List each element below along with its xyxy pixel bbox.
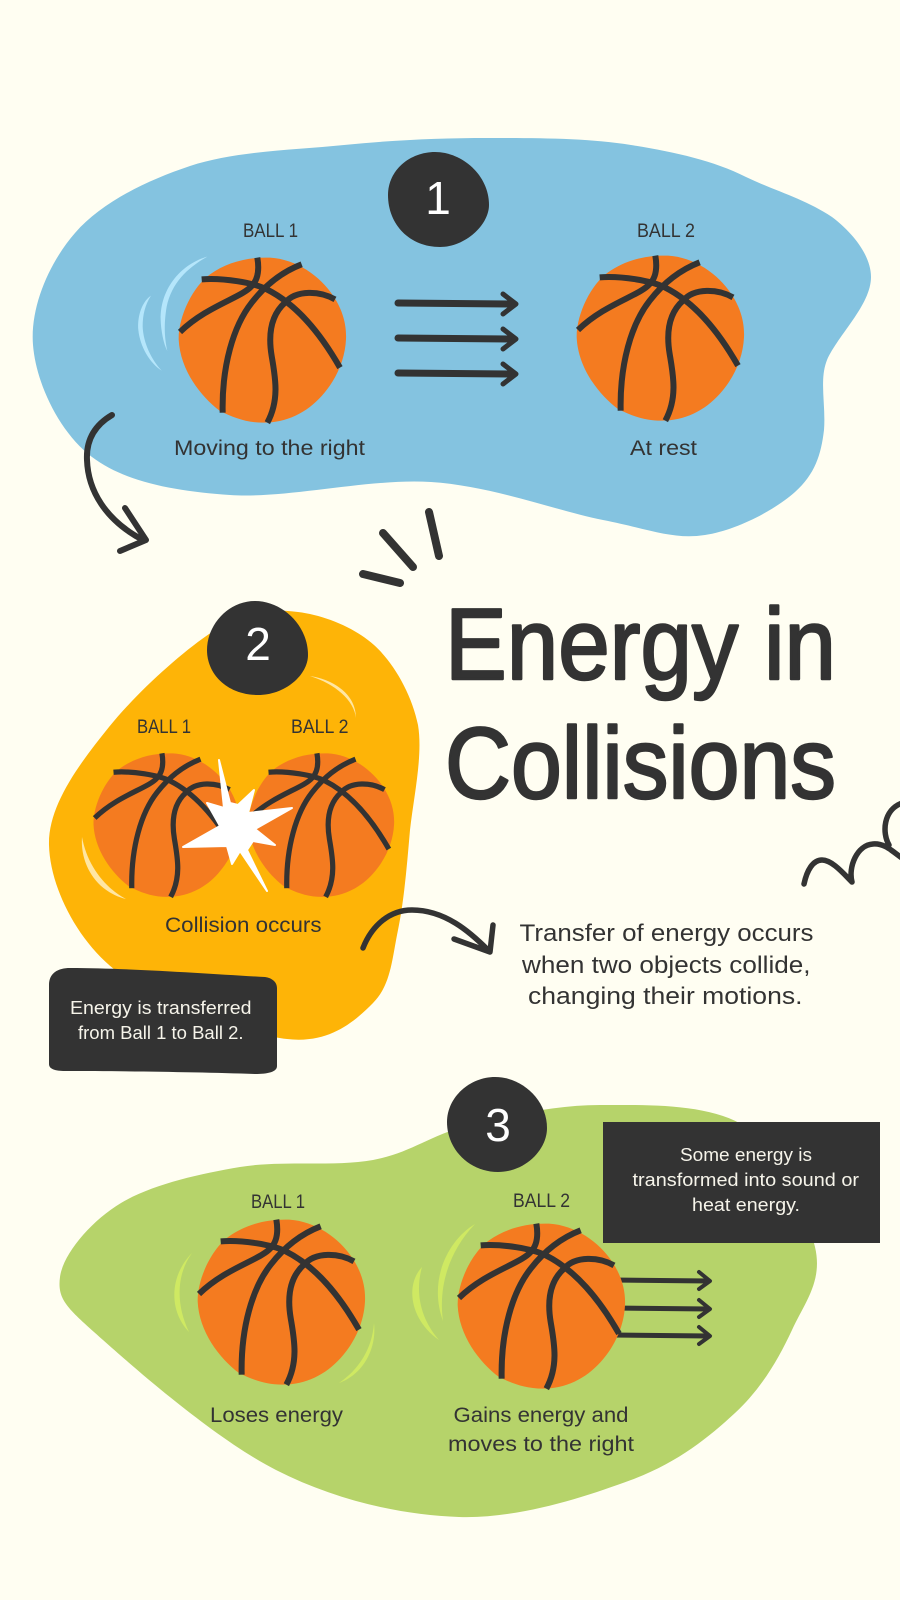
icon: burst dashes <box>363 512 439 583</box>
caption: gains energy and moves to the right: moves to the right <box>448 1433 634 1456</box>
arrow: curved from step 2 to text <box>363 910 493 952</box>
icon: basketball, step 2 ball 2 <box>248 753 394 897</box>
title: Energy in Collisions: Collisions <box>445 708 836 820</box>
caption: gains energy and moves to the right: Gains energy and <box>454 1404 628 1427</box>
label: step 1 ball 1: BALL 1 <box>243 221 298 242</box>
panel: step 1 blue blob <box>33 138 871 536</box>
label: step 2 ball 2: BALL 2 <box>291 717 348 738</box>
icon: white collision star <box>183 760 292 891</box>
callout: some energy is transformed: Some energy is <box>680 1144 812 1165</box>
callout: energy is transferred: Energy is transferred <box>70 997 251 1018</box>
badge: number 2 <box>207 601 308 695</box>
caption: collision occurs: Collision occurs <box>165 914 322 937</box>
text block: transfer of energy <box>520 920 814 1010</box>
label: step 3 ball 1: BALL 1 <box>251 1192 305 1213</box>
icon: basketball, step 2 ball 1 <box>93 753 239 897</box>
text block: transfer of energy: when two objects collide, <box>521 952 810 979</box>
label: step 3 ball 2: BALL 2 <box>513 1191 570 1212</box>
text block: transfer of energy: Transfer of energy occurs <box>520 920 814 947</box>
caption: gains energy and moves to the right <box>448 1404 634 1456</box>
title: Energy in Collisions <box>445 589 836 820</box>
callout: some energy is transformed <box>603 1122 880 1243</box>
text block: transfer of energy: changing their motions. <box>528 983 802 1010</box>
caption: loses energy: Loses energy <box>210 1404 344 1427</box>
arrows: three arrows pointing right <box>398 294 516 384</box>
callout: energy is transferred: from Ball 1 to Ball 2. <box>78 1022 244 1043</box>
icon: motion swoosh bottom left <box>82 837 126 899</box>
callout: some energy is transformed: heat energy. <box>692 1194 800 1215</box>
callout: energy is transferred <box>49 968 277 1074</box>
icon: basketball, step 3 ball 2 <box>458 1224 625 1389</box>
badge: number 3: 3 <box>485 1099 511 1151</box>
icon: motion swooshes behind ball 1 <box>138 257 207 371</box>
label: step 1 ball 2: BALL 2 <box>637 221 695 242</box>
callout: some energy is transformed: transformed into sound or <box>632 1169 859 1190</box>
arrow: curved from step 1 to step 2 <box>87 415 146 551</box>
arrows: three small arrows pointing right <box>612 1272 710 1344</box>
panel: step 3 green blob <box>59 1105 817 1517</box>
icon: cloud squiggle <box>804 803 900 884</box>
icons: light green motion swooshes <box>174 1224 475 1383</box>
caption: at rest: At rest <box>630 437 697 460</box>
title: Energy in Collisions: Energy in <box>445 589 836 701</box>
badge: number 1 <box>388 152 489 247</box>
badge: number 3 <box>447 1077 547 1172</box>
caption: moving to the right: Moving to the right <box>174 437 365 460</box>
label: step 2 ball 1: BALL 1 <box>137 717 191 738</box>
icon: basketball, step 1 ball 2 <box>577 256 744 421</box>
badge: number 2: 2 <box>245 618 271 670</box>
badge: number 1: 1 <box>425 172 451 224</box>
panel: step 2 orange blob <box>49 610 419 1040</box>
icon: basketball, step 3 ball 1 <box>198 1220 365 1385</box>
icon: motion swoosh top right <box>310 676 356 718</box>
icon: basketball, step 1 ball 1 <box>179 258 346 423</box>
